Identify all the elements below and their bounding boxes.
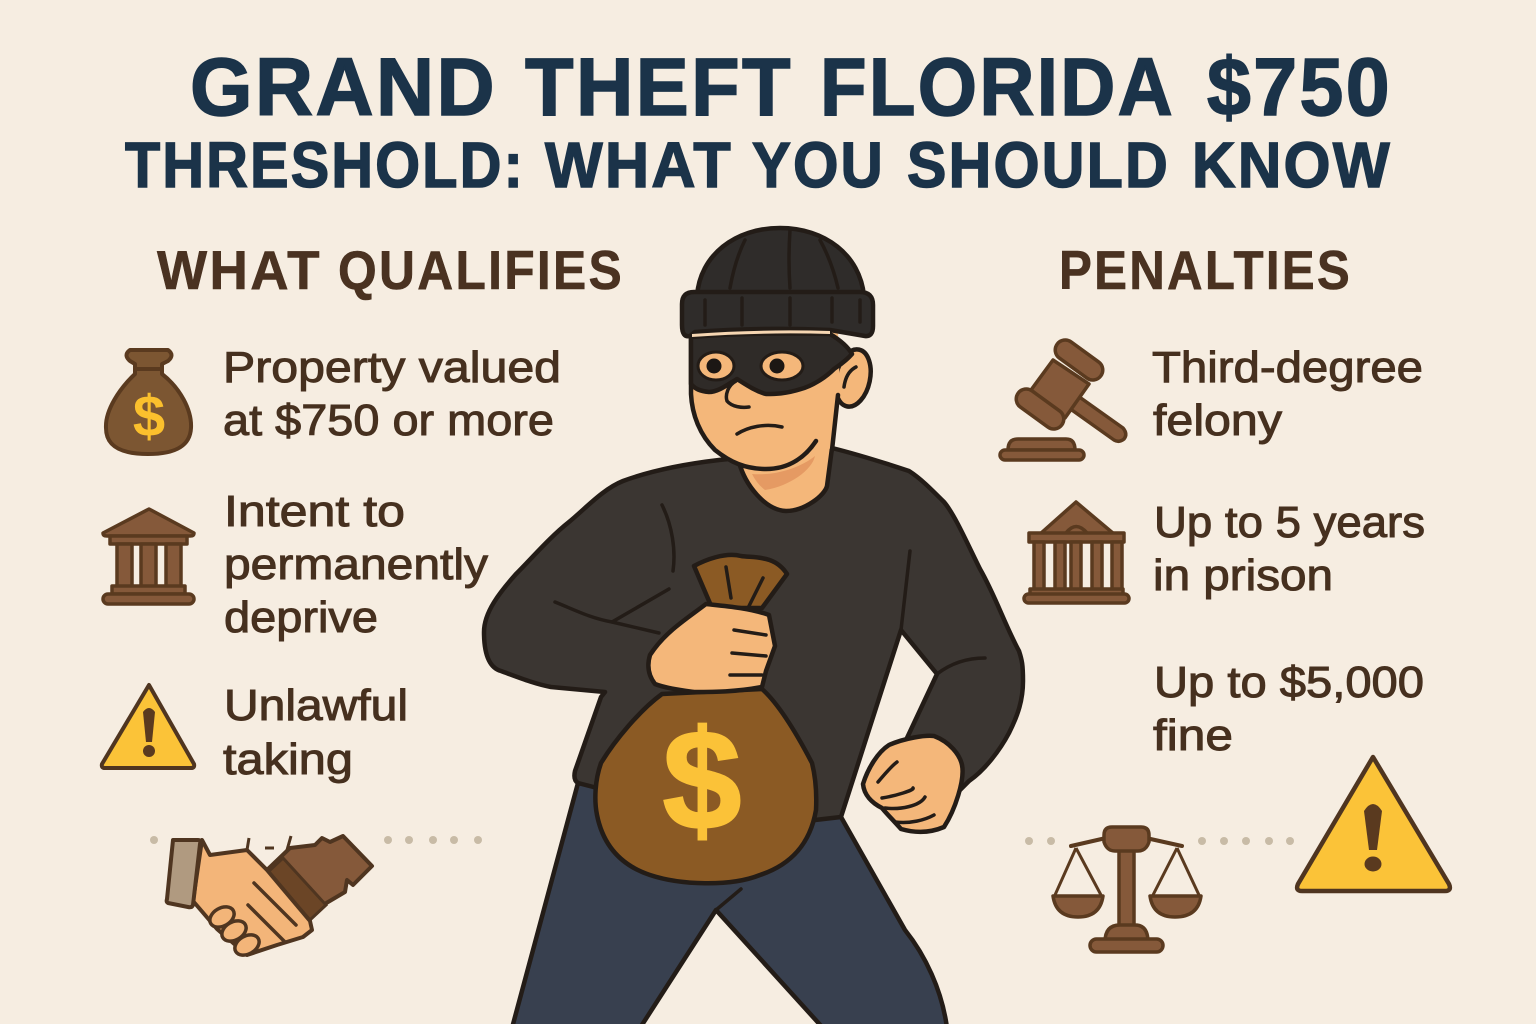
pants	[512, 783, 947, 1024]
money bag	[595, 689, 816, 883]
nose and mouth	[726, 381, 782, 434]
title: FLORIDA	[820, 42, 1175, 133]
text: third-degree felony: Third-degree	[1152, 343, 1423, 392]
text: fine: fine	[1153, 711, 1233, 760]
title: YOU	[752, 129, 885, 201]
icon: scales	[1053, 827, 1201, 952]
text: fine: Up to $5,000	[1154, 658, 1424, 707]
text: unlawful taking: Unlawful	[224, 681, 408, 730]
bag neck	[694, 555, 787, 608]
text: unlawful taking: taking	[223, 735, 353, 784]
icon: prison building	[1024, 502, 1129, 603]
heading: what qualifies: QUALIFIES	[338, 239, 624, 301]
text: intent: permanently	[224, 540, 488, 589]
title: $750	[1207, 42, 1392, 133]
icon: gavel	[1000, 336, 1126, 460]
panel: what qualifies list	[102, 343, 561, 784]
icon: money bag: $	[133, 384, 165, 449]
title: SHOULD	[907, 129, 1170, 201]
ear	[830, 346, 876, 410]
neck	[739, 400, 836, 511]
figure: burglar with money bag	[484, 228, 1023, 1024]
dollar sign: $	[663, 701, 741, 860]
heading: penalties: PENALTIES	[1059, 239, 1352, 301]
panel: penalties list	[1000, 336, 1450, 952]
dotted lines	[150, 836, 1294, 845]
sweater	[484, 448, 1023, 820]
icon: warning triangle	[102, 685, 194, 768]
text: prison: Up to 5 years	[1154, 498, 1425, 547]
face	[691, 330, 840, 469]
icon: handshake	[167, 836, 372, 959]
sweater folds	[555, 505, 985, 674]
text: intent: Intent to	[224, 487, 405, 536]
hat	[697, 228, 864, 296]
title: KNOW	[1192, 129, 1392, 201]
text: property valued: at $750 or more	[223, 396, 554, 445]
icon: courthouse	[103, 509, 194, 604]
title: THEFT	[525, 42, 793, 133]
clenched hand	[863, 736, 963, 832]
title: GRAND	[190, 42, 497, 133]
title	[125, 42, 1392, 201]
heading: what qualifies: WHAT	[157, 239, 322, 301]
icon: money bag	[106, 350, 191, 454]
text: intent: deprive	[224, 593, 378, 642]
text: prison: in prison	[1153, 551, 1333, 600]
title: THRESHOLD:	[125, 129, 525, 201]
icon: large warning triangle	[1297, 757, 1450, 891]
gripping hand	[648, 604, 775, 692]
text: third-degree felony: felony	[1153, 396, 1282, 445]
eyes	[698, 352, 734, 380]
title: WHAT	[545, 129, 733, 201]
mask	[691, 333, 852, 394]
text: property valued: Property valued	[223, 343, 561, 392]
